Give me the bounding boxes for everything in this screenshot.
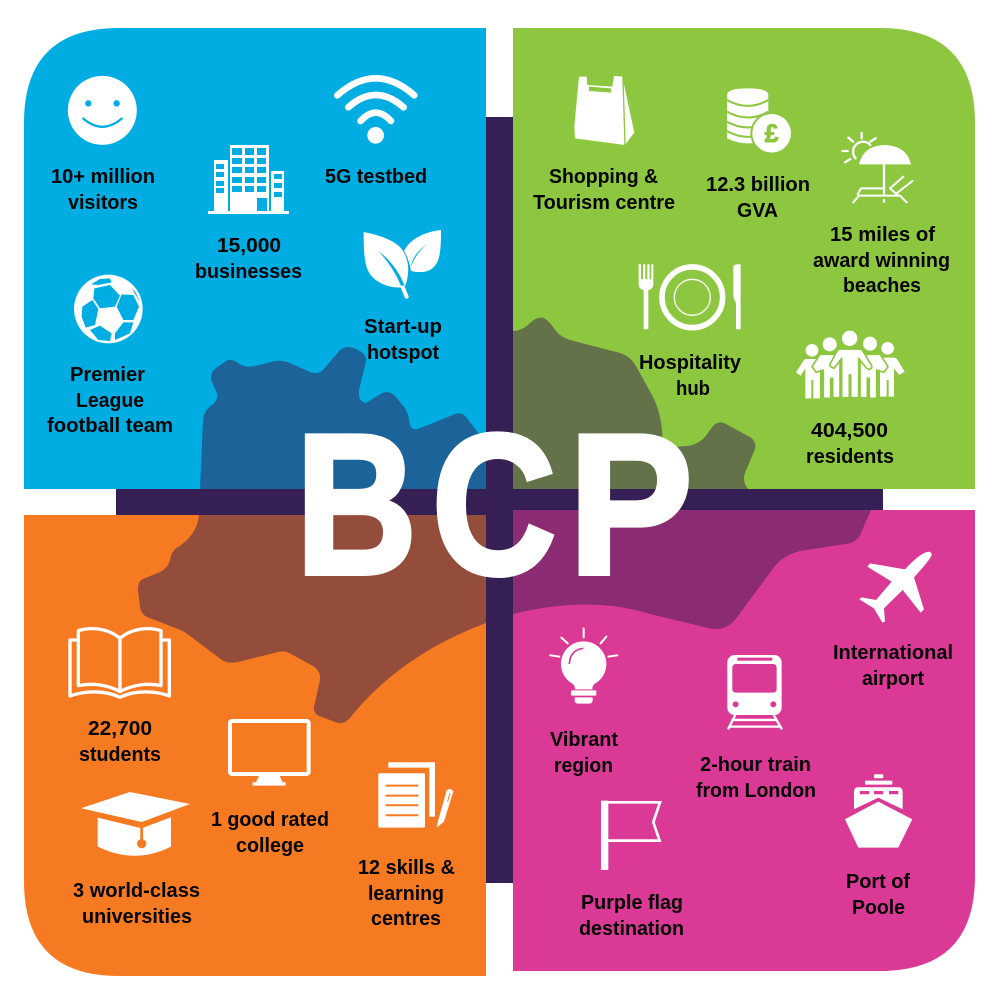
text: students: 22,700 <box>88 718 152 740</box>
text: 5G testbed: 5G testbed <box>325 166 427 188</box>
text: skills centres <box>358 857 455 930</box>
panel: blue quadrant <box>24 28 486 489</box>
text: hospitality hub <box>639 352 742 400</box>
title: BCP: B <box>296 394 417 617</box>
text: premier league: football team <box>47 415 173 437</box>
icon: graduation cap <box>81 792 190 856</box>
panel: orange quadrant <box>24 515 486 976</box>
map silhouette: orange <box>138 515 486 723</box>
panel: pink quadrant <box>513 510 975 971</box>
text: shopping and tourism <box>533 166 675 214</box>
text: beaches <box>813 224 950 297</box>
text: train from London: from London <box>696 780 816 802</box>
text: purple flag: Purple flag <box>581 892 683 914</box>
text: vibrant region: region <box>554 755 613 777</box>
text: students <box>79 718 161 766</box>
text: residents: residents <box>806 446 894 468</box>
icon: leaves <box>363 230 441 297</box>
text: skills centres: centres <box>371 908 441 930</box>
text: purple flag: destination <box>579 918 684 940</box>
text: premier league: League <box>76 390 144 412</box>
icon: wifi <box>337 78 414 144</box>
text: visitors <box>51 166 155 214</box>
text: port of poole <box>846 871 910 919</box>
icon: coins with pound: £ <box>765 121 779 148</box>
text: shopping and tourism: Shopping & <box>549 166 658 188</box>
text: businesses <box>195 235 302 283</box>
text: vibrant region <box>550 729 618 777</box>
text: skills centres: learning <box>368 883 444 905</box>
text: airport: International <box>833 642 953 664</box>
text: shopping and tourism: Tourism centre <box>533 192 675 214</box>
text: premier league: Premier <box>70 364 145 386</box>
title: BCP: P <box>568 393 693 616</box>
text: GVA: GVA <box>737 200 778 222</box>
text: GVA: 12.3 billion <box>706 174 810 196</box>
text: skills centres: 12 skills & <box>358 857 455 879</box>
text: universities: universities <box>82 906 192 928</box>
icon: coins with pound <box>727 88 793 155</box>
text: residents <box>806 420 894 468</box>
map silhouette: green <box>513 318 755 489</box>
text: businesses: businesses <box>195 261 302 283</box>
text: beaches: 15 miles of <box>830 224 935 246</box>
text: train from London <box>696 754 816 802</box>
text: hospitality hub: Hospitality <box>639 352 742 374</box>
text: beaches: award winning <box>813 250 950 272</box>
text: residents: 404,500 <box>811 420 888 442</box>
icon: shopping bag <box>574 76 634 145</box>
icon: documents and pen <box>378 762 453 828</box>
text: hospitality hub: hub <box>676 378 710 400</box>
icon: computer monitor <box>230 721 309 786</box>
text: visitors: 10+ million <box>51 166 155 188</box>
text: college: 1 good rated <box>211 809 329 831</box>
text: college: college <box>236 835 304 857</box>
text: students: students <box>79 744 161 766</box>
icon: light bulb <box>550 628 617 704</box>
text: start-up hotspot <box>364 316 442 364</box>
icon: football <box>74 275 143 343</box>
text: universities <box>73 880 200 928</box>
icon: flag <box>601 801 660 870</box>
text: port of poole: Port of <box>846 871 910 893</box>
icon: smiley <box>68 76 137 145</box>
icon: office buildings <box>208 145 289 214</box>
icon: airplane <box>859 552 932 623</box>
icon: group of people <box>796 331 905 398</box>
icon: train <box>727 655 782 729</box>
text: premier league <box>47 364 173 437</box>
text: universities: 3 world-class <box>73 880 200 902</box>
text: businesses: 15,000 <box>217 235 281 257</box>
title: BCP: C <box>432 393 556 616</box>
text: port of poole: Poole <box>852 897 905 919</box>
icon: ship <box>845 774 912 848</box>
text: college <box>211 809 329 857</box>
icon: beach umbrella <box>842 133 912 202</box>
text: airport: airport <box>862 668 924 690</box>
text: GVA <box>706 174 810 222</box>
text: beaches: beaches <box>843 275 921 297</box>
text: train from London: 2-hour train <box>700 754 811 776</box>
title: BCP <box>296 393 693 617</box>
text: vibrant region: Vibrant <box>550 729 618 751</box>
icon: open book <box>70 629 169 697</box>
purple cross behind panels <box>116 117 883 883</box>
text: airport <box>833 642 953 690</box>
map silhouette: blue <box>200 347 486 489</box>
map silhouette: pink <box>513 510 871 629</box>
text: start-up hotspot: Start-up <box>364 316 442 338</box>
panel: green quadrant <box>513 28 975 489</box>
icon: plate and cutlery <box>639 264 741 329</box>
text: visitors: visitors <box>68 192 138 214</box>
text: start-up hotspot: hotspot <box>367 342 439 364</box>
text: purple flag <box>579 892 684 940</box>
